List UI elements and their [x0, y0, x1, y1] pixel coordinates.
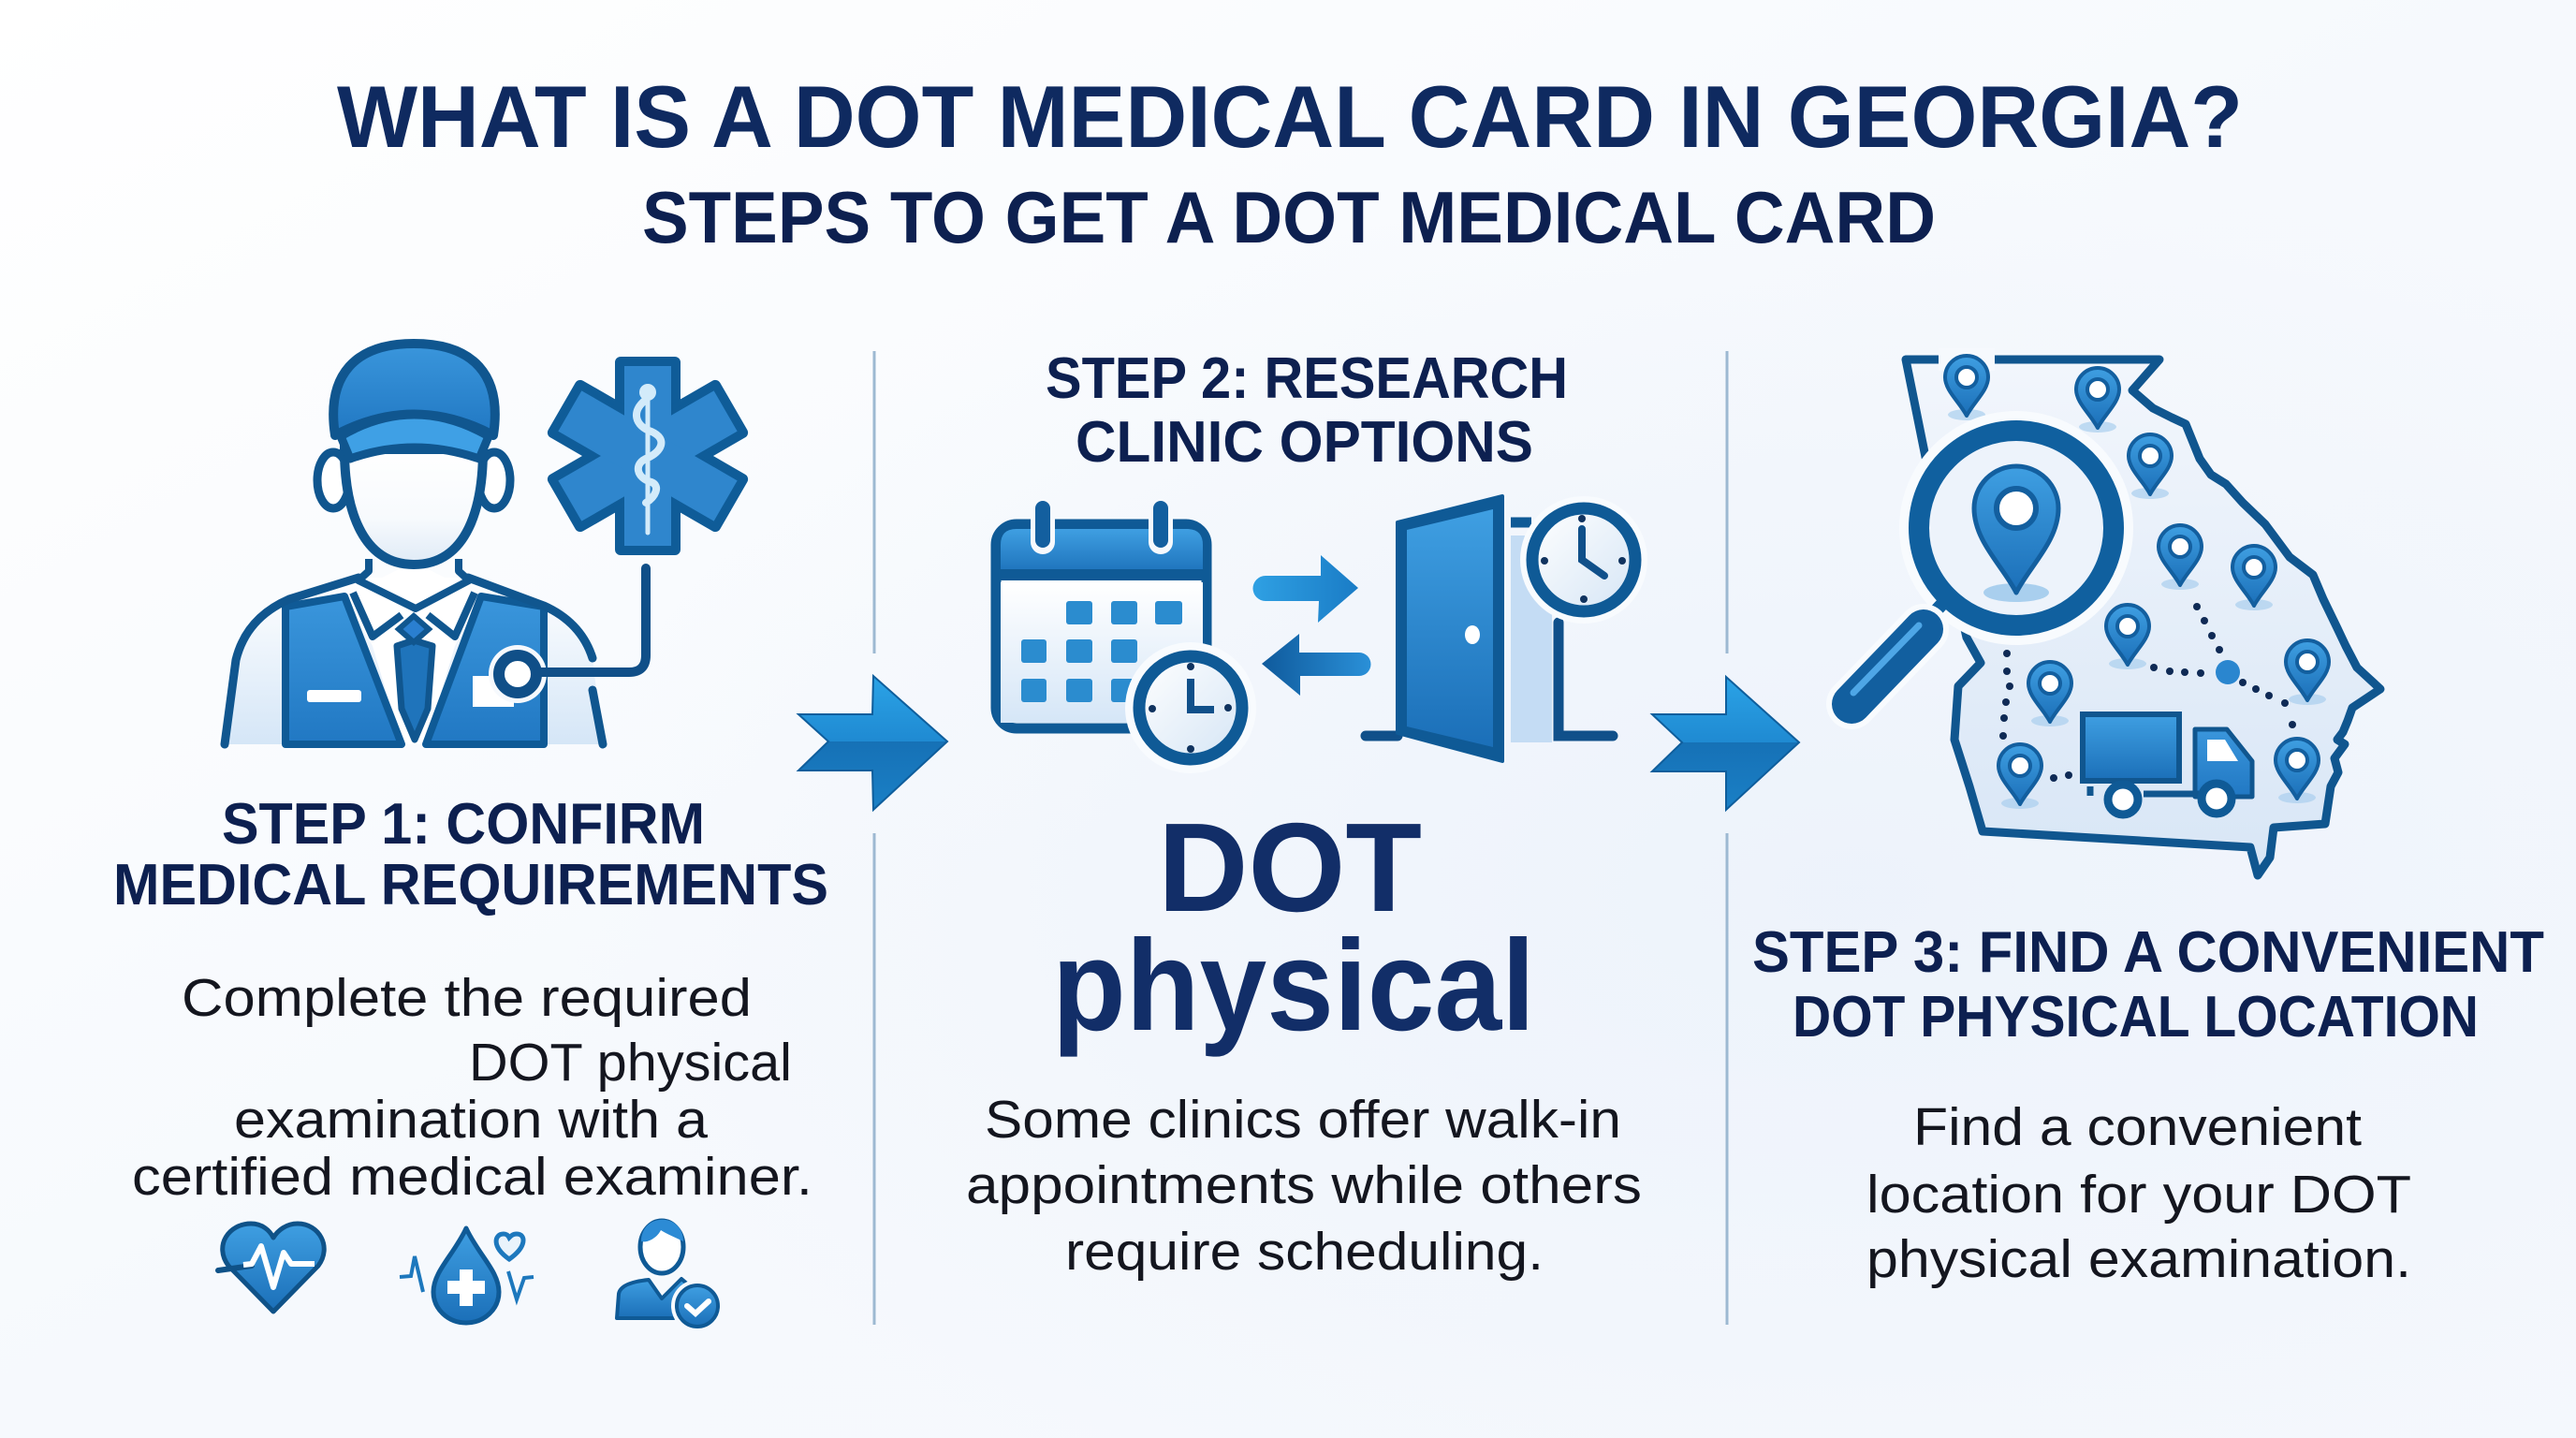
heading: step 1: MEDICAL REQUIREMENTS: [113, 853, 828, 917]
divider lines: [874, 351, 1727, 1325]
text: step 1 description: [132, 968, 812, 1207]
arrow: step 1 to step 2: [798, 676, 947, 810]
icon: person with check badge: [617, 1220, 724, 1332]
icon: calendar with clock: [996, 501, 1256, 773]
text: step 1 description: Complete the required: [182, 968, 752, 1028]
text: step 3 description: Find a convenient: [1913, 1097, 2362, 1157]
heading: step 2: STEP 2: RESEARCH: [1046, 346, 1568, 411]
heading: step 3: DOT PHYSICAL LOCATION: [1793, 985, 2479, 1049]
text: step 1 description: DOT physical: [469, 1033, 792, 1093]
large label: DOT physical: physical: [1052, 914, 1535, 1058]
icon: blood drop with cross: [400, 1228, 534, 1323]
panel: step 2: [966, 346, 1647, 1282]
heading: step 3: STEP 3: FIND A CONVENIENT: [1752, 920, 2544, 985]
text: step 2 description: appointments while others: [966, 1155, 1642, 1215]
text: step 2 description: require scheduling.: [1065, 1222, 1544, 1282]
heading: step 2: [1046, 346, 1568, 475]
route dots: [1999, 603, 2296, 782]
icon: Georgia map with pins and truck: [1852, 348, 2380, 875]
panel: step 1: [113, 344, 828, 1332]
heading: step 2: CLINIC OPTIONS: [1076, 410, 1533, 475]
icon: medical examiner with stethoscope: [225, 344, 646, 744]
location pins: [1939, 348, 2329, 809]
text: step 1 description: certified medical examiner.: [132, 1147, 812, 1207]
icon: heart with pulse: [218, 1224, 324, 1312]
panel: step 3: [1752, 348, 2544, 1289]
icon: door with clock: [1366, 496, 1647, 761]
text: step 1 description: examination with a: [234, 1090, 708, 1150]
magnifying glass: [1852, 411, 2133, 704]
truck: [2083, 714, 2252, 814]
large label: DOT physical: DOT: [1158, 797, 1422, 938]
large label: DOT physical: [1052, 797, 1535, 1058]
heading: step 1: [113, 792, 828, 917]
heading: step 1: STEP 1: CONFIRM: [222, 792, 705, 857]
text: step 3 description: [1866, 1097, 2411, 1289]
heading: step 3: [1752, 920, 2544, 1049]
text: step 3 description: physical examination.: [1866, 1229, 2411, 1289]
icon: star of life: [549, 360, 746, 552]
title: WHAT IS A DOT MEDICAL CARD IN GEORGIA?: [337, 67, 2243, 166]
subtitle: STEPS TO GET A DOT MEDICAL CARD: [642, 176, 1936, 258]
text: step 3 description: location for your DOT: [1866, 1165, 2411, 1225]
icon: swap arrows: [1252, 555, 1370, 696]
text: step 2 description: Some clinics offer walk-in: [985, 1090, 1621, 1150]
text: step 2 description: [966, 1090, 1642, 1282]
arrow: step 2 to step 3: [1652, 677, 1799, 810]
map outline: [1906, 360, 2380, 875]
